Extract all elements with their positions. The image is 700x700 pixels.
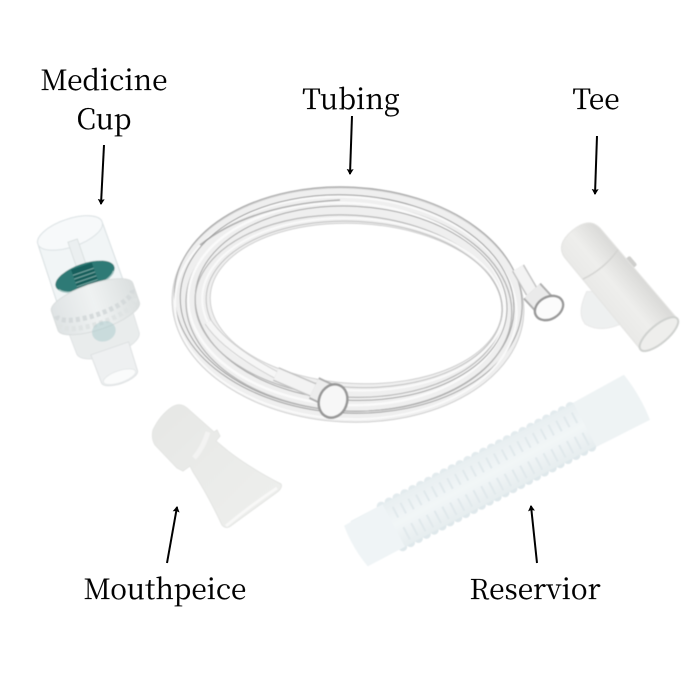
label: Medicine Cup [40, 59, 168, 138]
part: coiled tubing [166, 178, 567, 431]
tee: side branch [570, 285, 625, 342]
tee: open end [635, 312, 683, 356]
reservoir: body [351, 381, 638, 564]
cup: clear dome [32, 208, 130, 322]
reservoir: rib lines lower [398, 436, 591, 538]
arrow: Mouthpeice [167, 507, 177, 563]
cup: lower body [66, 303, 144, 366]
reservoir: rib lines upper [387, 415, 580, 517]
reservoir: right cuff [573, 373, 651, 448]
cup: teal reflection [89, 318, 118, 345]
tubing: right connector [518, 268, 567, 325]
label: Mouthpeice: Mouthpeice [84, 568, 246, 608]
label: Tubing: Tubing [302, 78, 400, 118]
arrow: Reservior [531, 506, 537, 563]
arrow: Medicine Cup [101, 145, 104, 204]
tubing: shadow arc upper left [200, 200, 340, 245]
tee: small tab [625, 256, 637, 269]
label: Tee: Tee [572, 78, 620, 118]
cup: knurled ring [47, 271, 144, 342]
arrow: Tubing [350, 116, 352, 174]
part: tee [534, 213, 686, 373]
reservoir: left cuff [343, 504, 405, 568]
tubing: bottom connector [208, 322, 352, 422]
label: Medicine Cup: Cup [77, 98, 131, 138]
label: Medicine Cup: Medicine [40, 59, 168, 99]
cup: neck [91, 342, 141, 390]
reservoir: scalloped rib edges [381, 404, 595, 547]
tee: main tube [554, 215, 678, 350]
label: Reservior: Reservior [469, 568, 601, 608]
cup: teal disc [51, 254, 120, 303]
part: medicine cup [25, 206, 162, 397]
part: reservoir [342, 373, 651, 570]
part: mouthpiece [152, 405, 281, 528]
tubing: coil [166, 178, 530, 431]
arrow: Tee [595, 136, 597, 194]
